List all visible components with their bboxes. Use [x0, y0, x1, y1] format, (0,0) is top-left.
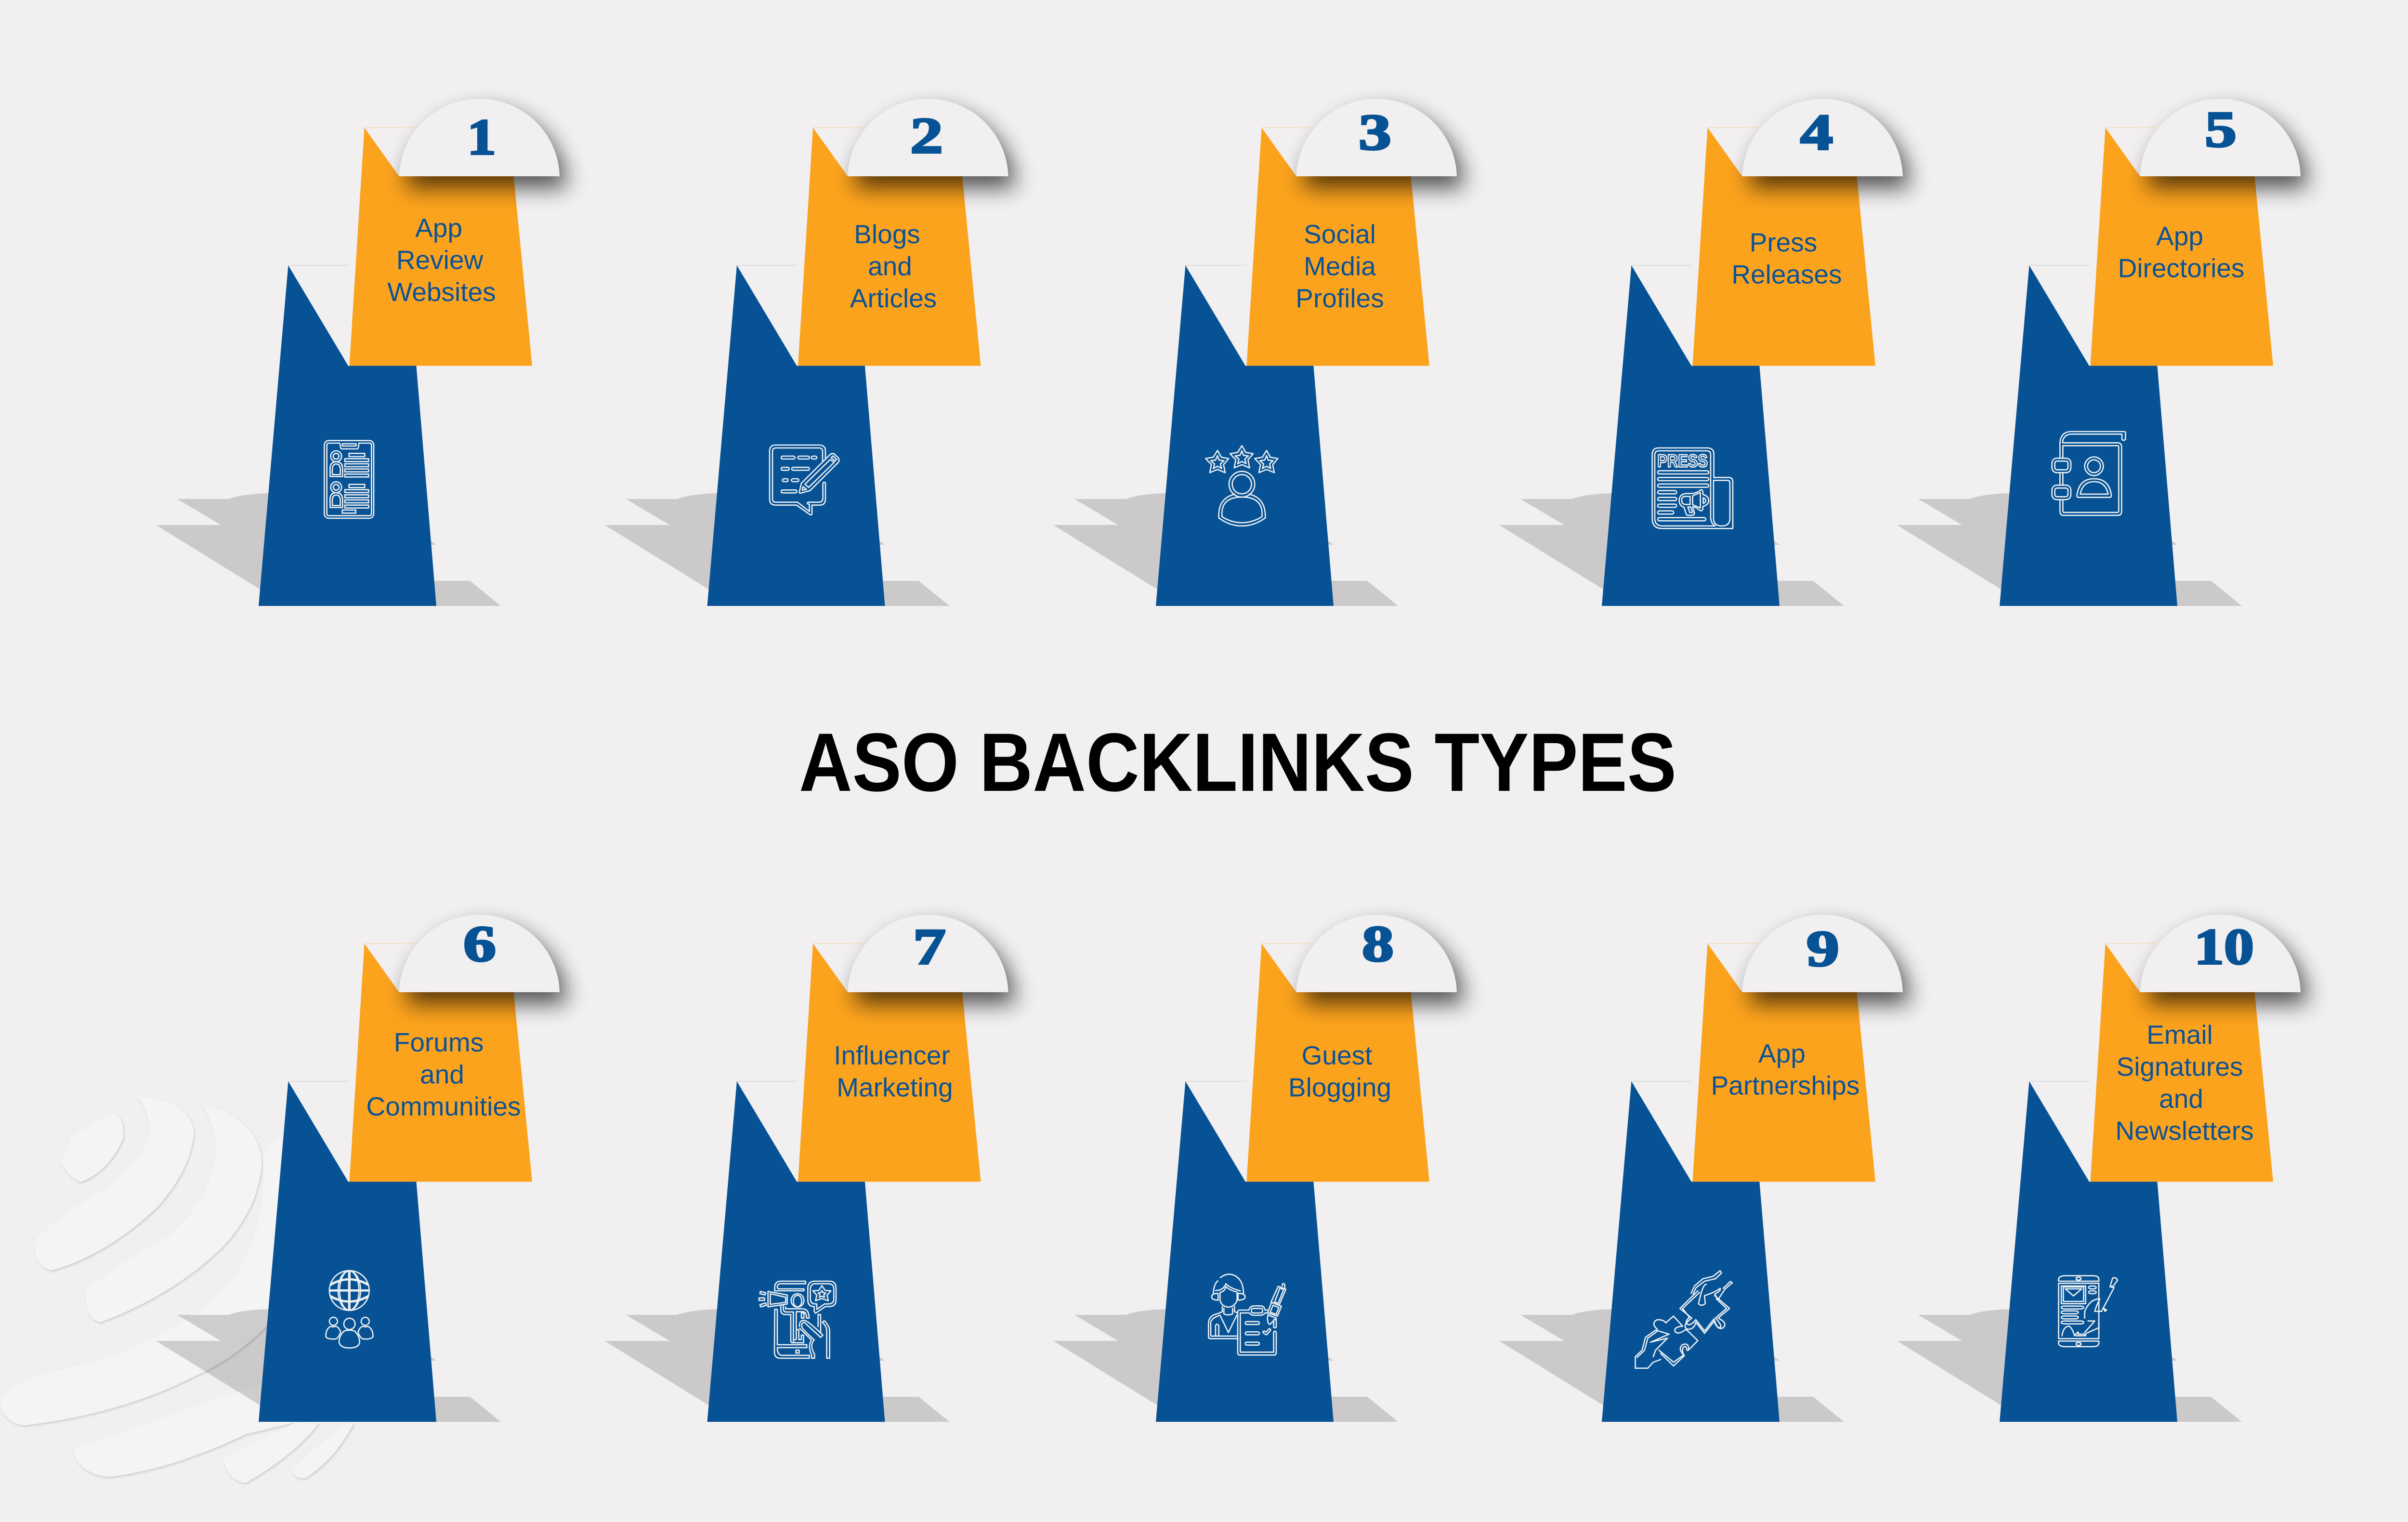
label 6: Forums	[394, 1027, 484, 1057]
label 6	[366, 1027, 521, 1121]
icon: influencer on phone with megaphone	[759, 1281, 836, 1358]
card shapes 7	[605, 915, 1015, 1422]
number 3: 3	[1359, 104, 1391, 160]
number 4: 4	[1800, 104, 1833, 160]
card shapes 3	[1053, 99, 1464, 606]
label 1: Review	[396, 245, 483, 275]
label 8: Guest	[1302, 1040, 1372, 1070]
label 5: App	[2156, 221, 2203, 251]
icon: app review phone	[324, 441, 374, 518]
card shapes 6	[156, 915, 566, 1422]
label 9	[1711, 1038, 1859, 1100]
card shapes 9	[1499, 915, 1910, 1422]
icon: blogger with clipboard and pen	[1208, 1274, 1286, 1355]
card shapes 5	[1897, 99, 2307, 606]
card shapes 10	[1897, 915, 2307, 1422]
number 8: 8	[1362, 916, 1394, 972]
number 6: 6	[463, 916, 496, 972]
card shapes 1	[156, 99, 566, 606]
label 6: and	[420, 1060, 464, 1089]
panel: 10 Email Signatures and Newsletters	[1897, 915, 2307, 1422]
panel: 2 Blogs and Articles	[605, 99, 1015, 606]
icon: person with three stars	[1205, 446, 1278, 526]
icon: blog speech bubble with pencil	[770, 445, 839, 515]
panel: 7 Influencer Marketing	[605, 915, 1015, 1422]
label 7: Marketing	[837, 1072, 953, 1102]
label 8: Blogging	[1288, 1072, 1391, 1102]
label 2	[850, 219, 937, 313]
label 10: and	[2159, 1084, 2203, 1114]
card shapes 8	[1053, 915, 1464, 1422]
label 10	[2115, 1020, 2254, 1145]
label 2: Blogs	[854, 219, 920, 249]
logo watermark: swirling globe	[0, 1097, 354, 1483]
label 2: Articles	[850, 283, 937, 313]
panel: 3 Social Media Profiles	[1053, 99, 1464, 606]
number 10: 10	[2194, 918, 2254, 975]
label 10: Email	[2146, 1020, 2213, 1050]
label 3: Profiles	[1296, 283, 1384, 313]
icon: press newspaper with megaphone	[1652, 448, 1733, 528]
number 5: 5	[2205, 101, 2237, 157]
icon: press newspaper with megaphone: PRESS	[1657, 450, 1708, 471]
label 4	[1731, 227, 1842, 289]
title: ASO BACKLINKS TYPES	[799, 716, 1676, 809]
icon: address book	[2052, 432, 2125, 515]
number 1: 1	[467, 109, 496, 165]
panel: 8 Guest Blogging	[1053, 915, 1464, 1422]
icon: phone with email and signature	[2059, 1276, 2118, 1347]
label 8	[1288, 1040, 1391, 1102]
label 3: Media	[1304, 251, 1376, 281]
label 10: Signatures	[2117, 1052, 2243, 1082]
label 6: Communities	[366, 1091, 521, 1121]
label 1: Websites	[387, 277, 496, 307]
label 7	[834, 1040, 953, 1102]
label 2: and	[868, 251, 912, 281]
panel: 6 Forums and Communities	[156, 915, 566, 1422]
label 5: Directories	[2118, 253, 2244, 283]
panel: 1 App Review Websites	[156, 99, 566, 606]
card shapes 2	[605, 99, 1015, 606]
panel: 9 App Partnerships	[1499, 915, 1910, 1422]
panel: 5 App Directories	[1897, 99, 2307, 606]
label 3	[1296, 219, 1384, 313]
label 1: App	[415, 213, 462, 243]
label 3: Social	[1304, 219, 1376, 249]
card shapes 4	[1499, 99, 1910, 606]
panel: 4 Press Releases	[1499, 99, 1910, 606]
number 9: 9	[1806, 920, 1839, 977]
label 4: Press	[1750, 227, 1817, 257]
number 2: 2	[910, 107, 943, 164]
label 9: App	[1758, 1038, 1806, 1068]
label 7: Influencer	[834, 1040, 950, 1070]
label 9: Partnerships	[1711, 1070, 1859, 1100]
icon: globe with people	[326, 1271, 373, 1348]
label 10: Newsletters	[2115, 1115, 2254, 1145]
label 5	[2118, 221, 2244, 283]
label 1	[387, 213, 496, 307]
label 4: Releases	[1731, 259, 1842, 289]
icon: hands joining puzzle pieces	[1636, 1271, 1732, 1368]
number 7: 7	[913, 918, 946, 975]
